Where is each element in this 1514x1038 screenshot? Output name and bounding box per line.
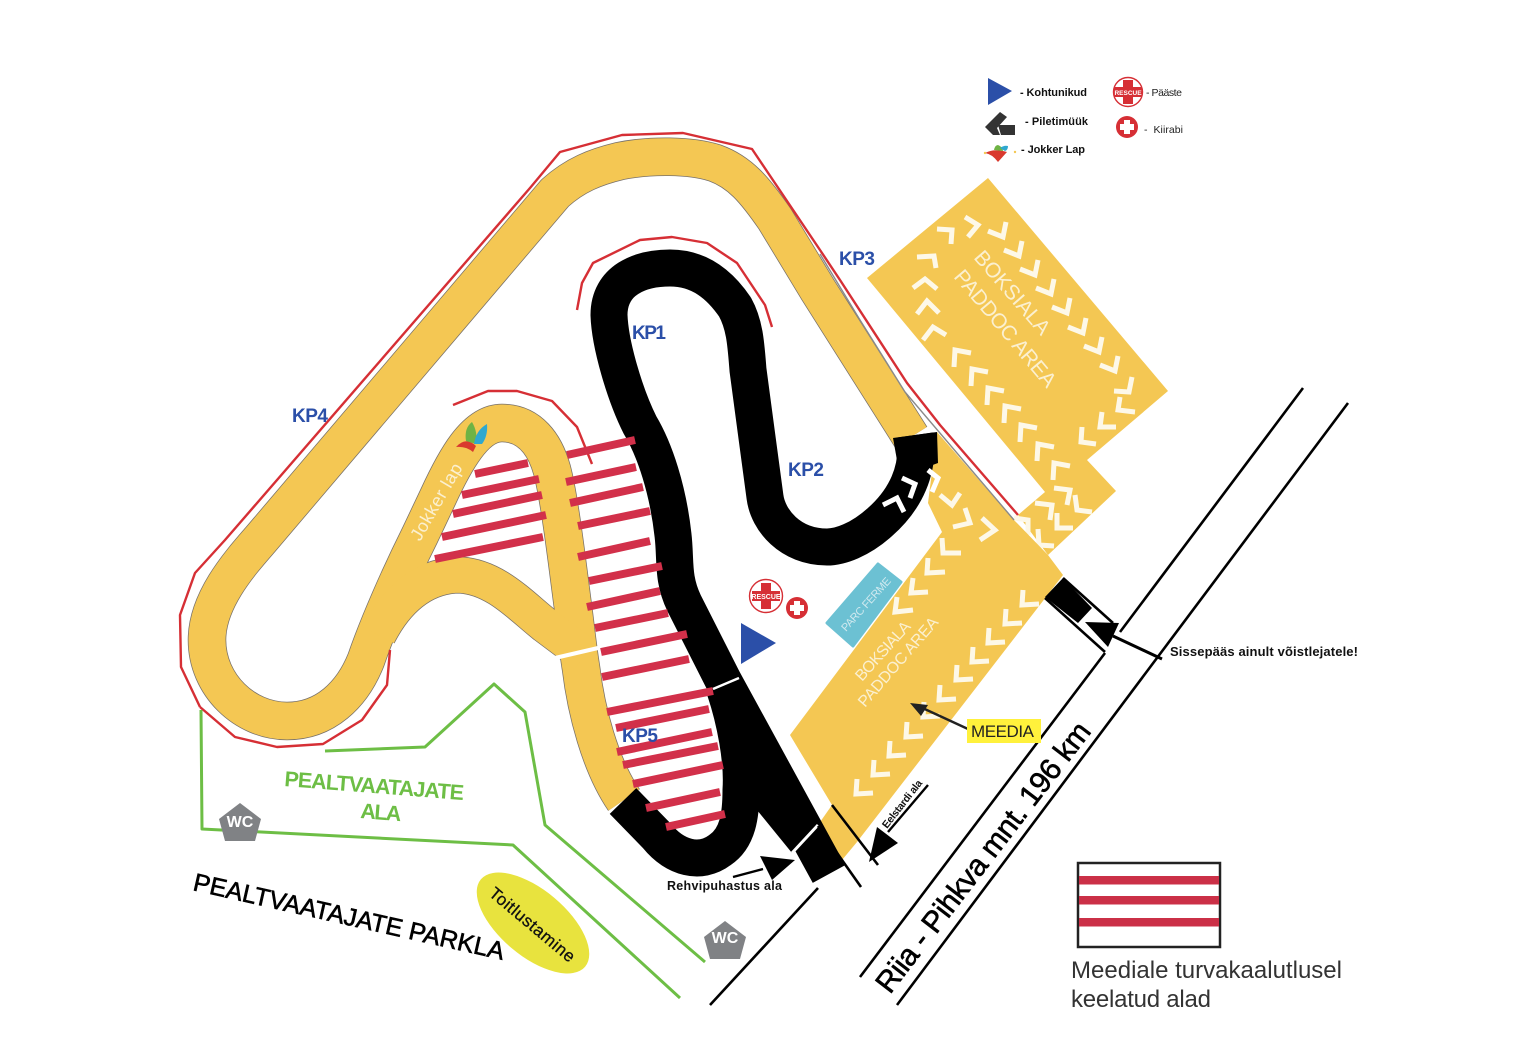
arrow and label: pre-start: Eelstardi ala (880, 778, 925, 831)
label: spectator area: ALA (360, 799, 402, 826)
legend: first aid (1116, 116, 1183, 138)
legend: rescue: - Pääste (1146, 87, 1182, 99)
arrow and label: pre-start (869, 778, 928, 862)
icon: rescue on map (750, 580, 782, 612)
legend: rescue (1114, 78, 1182, 106)
upper paddock area (867, 178, 1168, 555)
legend text: forbidden area: Meediale turvakaalutlusel (1071, 957, 1342, 984)
icon: WC left (219, 803, 261, 841)
label: spectator parking: PEALTVAATAJATE PARKLA (191, 869, 507, 966)
black track (609, 268, 938, 874)
icon: WC left: WC (227, 814, 254, 831)
label: Jokker lap: Jokker lap (406, 460, 466, 544)
white chevrons on black track (883, 470, 938, 512)
icon: first aid on map (786, 597, 808, 619)
legend: forbidden area swatch (1078, 863, 1220, 947)
lower paddock area: PADDOC AREA (855, 614, 942, 711)
legend text: forbidden area (1071, 957, 1342, 1013)
KP labels: KP2 (788, 460, 824, 481)
icon: WC right: WC (712, 930, 739, 947)
legend: ticket sales (985, 112, 1089, 135)
arrow and label: competitors entrance: Sissepääs ainult võistlejatele! (1170, 644, 1358, 659)
KP labels (292, 249, 875, 747)
icon: WC right (704, 921, 746, 959)
KP labels: KP4 (292, 406, 328, 427)
yellow track: outer loop and Jokker lap (207, 157, 911, 800)
lower paddock area (790, 432, 1063, 842)
media label with arrow: MEEDIA (971, 722, 1035, 741)
road label: Riia - Pihkva mnt. 196 km (869, 716, 1098, 999)
KP labels: KP1 (632, 323, 666, 344)
start and tyre cleaning dividers (555, 648, 818, 853)
catering ellipse: Toitlustamine (485, 884, 579, 966)
yellow wedge by start (818, 805, 857, 860)
arrow and label: tyre cleaning (667, 856, 795, 893)
arrow and label: tyre cleaning: Rehvipuhastus ala (667, 879, 783, 893)
KP labels: KP3 (839, 249, 875, 270)
gate: competitor entrance block (1045, 578, 1092, 623)
media forbidden stripes (435, 440, 725, 827)
legend: judges (988, 78, 1087, 105)
upper paddock area: BOKSIALA (969, 246, 1055, 340)
parc ferme zone: PARC FERME (839, 575, 894, 634)
legend: Jokker lap: - Jokker Lap (1021, 144, 1085, 156)
legend: judges: - Kohtunikud (1020, 87, 1087, 99)
green spectator fence (201, 684, 705, 998)
icon: jester on track (456, 422, 487, 452)
legend: first aid: - Kiirabi (1144, 124, 1183, 136)
upper paddock area: PADDOC AREA (949, 265, 1061, 392)
icon: rescue on map: RESCUE (751, 594, 781, 601)
legend: Jokker lap (984, 144, 1085, 162)
label: spectator area (284, 767, 465, 826)
road lines (710, 388, 1348, 1005)
legend text: forbidden area: keelatud alad (1071, 986, 1211, 1013)
label: spectator area: PEALTVAATAJATE (284, 767, 465, 805)
icon: judges triangle (741, 623, 776, 664)
legend: rescue: RESCUE (1114, 90, 1142, 97)
lower paddock area: BOKSIALA (852, 618, 915, 685)
legend: ticket sales: - Piletimüük (1025, 116, 1089, 128)
KP labels: KP5 (622, 726, 658, 747)
arrow and label: competitors entrance (1085, 622, 1358, 659)
parc ferme zone (827, 564, 901, 646)
media label with arrow (910, 703, 1041, 743)
red safety barrier lines (180, 133, 1018, 747)
catering ellipse (460, 854, 606, 992)
